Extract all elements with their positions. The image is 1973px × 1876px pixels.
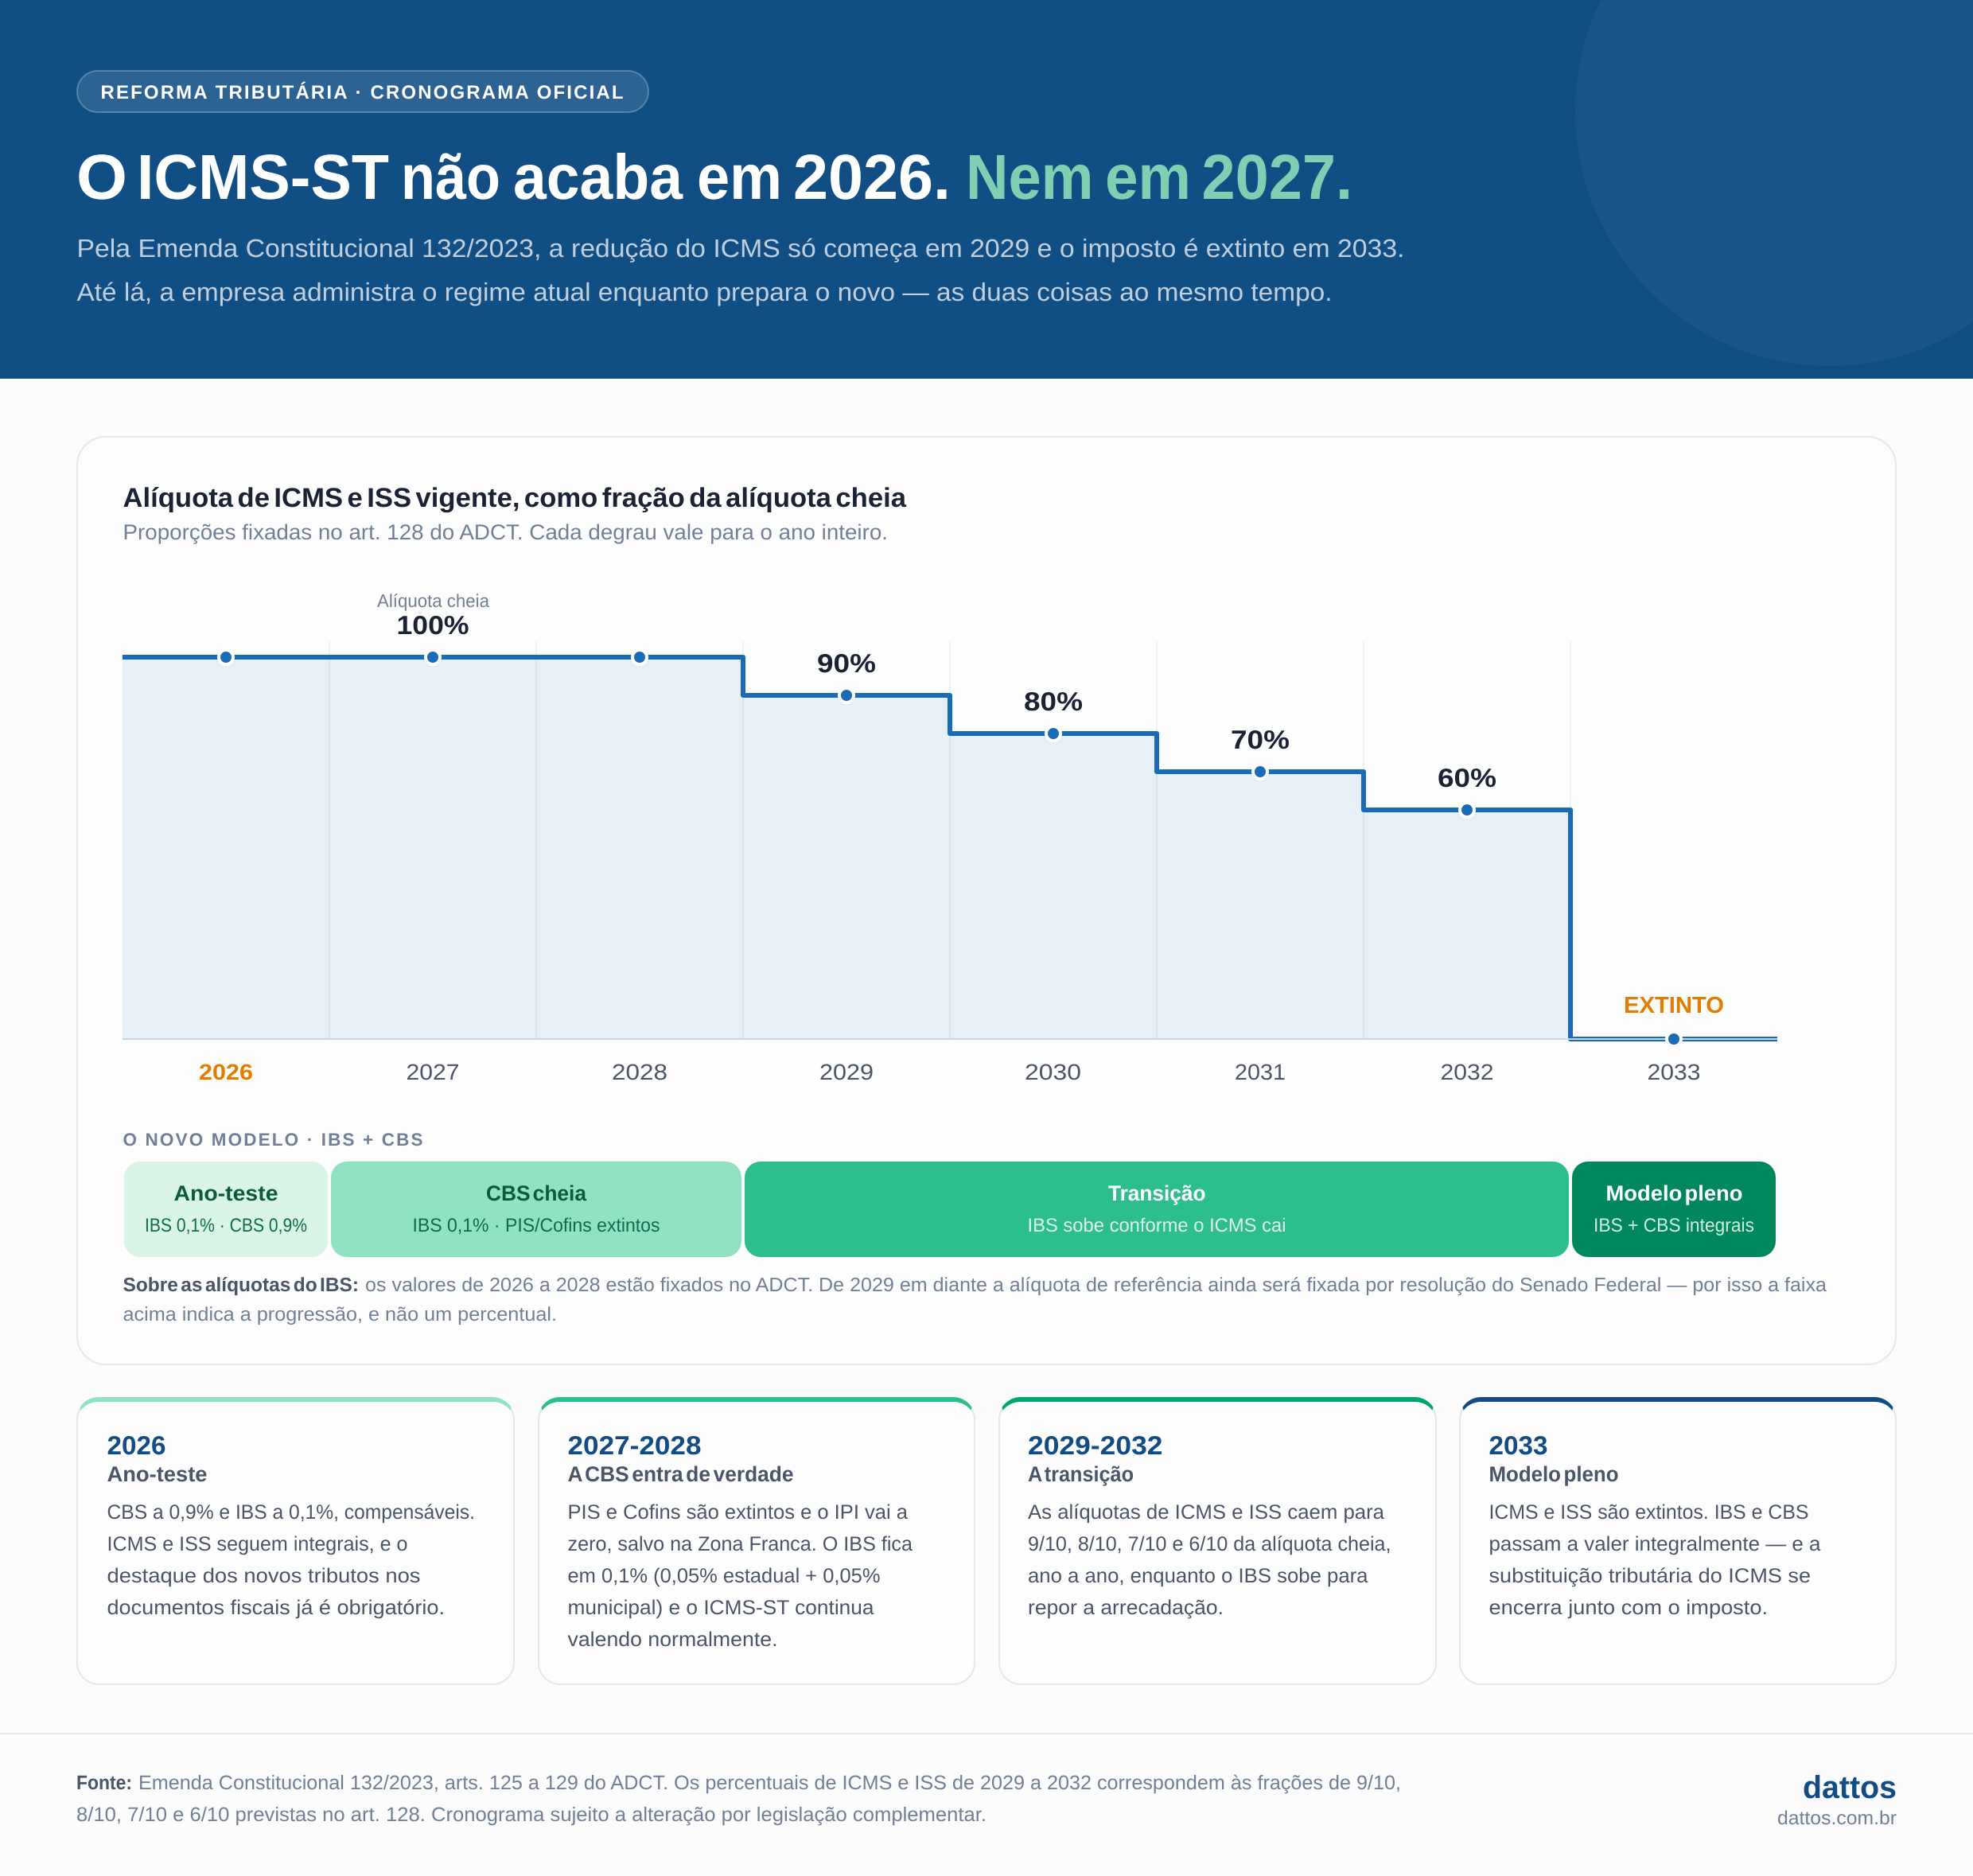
timeline band: CBS cheia: CBS cheia — [486, 1181, 587, 1205]
subtitle: Pela Emenda Constitucional 132/2023, a redução do ICMS só começa em 2029 e o imposto é extinto em 2033. — [76, 234, 1405, 263]
step chart: 2031 — [1235, 1060, 1286, 1084]
step chart: EXTINTO — [1624, 993, 1724, 1018]
card: 2026: ICMS e ISS seguem integrais, e o — [107, 1533, 407, 1555]
title: 2026. — [793, 142, 951, 212]
timeline band: transição: IBS sobe conforme o ICMS cai — [1028, 1215, 1286, 1236]
title: acaba — [513, 142, 683, 212]
card: 2027-2028: 2027-2028 — [568, 1430, 702, 1460]
timeline band: CBS cheia: IBS 0,1% · PIS/Cofins extintos — [412, 1215, 660, 1236]
source note: 8/10, 7/10 e 6/10 previstas no art. 128. Cronograma sujeito a alteração por legislação complementar. — [76, 1804, 986, 1826]
brand — [1777, 1770, 1897, 1829]
chart heading — [123, 483, 907, 544]
card: 2033: passam a valer integralmente — e a — [1489, 1533, 1821, 1555]
card: 2029-2032 — [998, 1397, 1437, 1685]
subtitle: Até lá, a empresa administra o regime atual enquanto prepara o novo — as duas coisas ao mesmo tempo. — [76, 278, 1332, 306]
title: em — [1105, 142, 1191, 212]
timeline band: ano-teste: IBS 0,1% · CBS 0,9% — [145, 1215, 307, 1236]
header banner — [0, 0, 1973, 379]
step chart: 2030 — [1025, 1060, 1081, 1084]
tag pill — [77, 71, 648, 112]
card: 2029-2032: 9/10, 8/10, 7/10 e 6/10 da alíquota cheia, — [1028, 1533, 1391, 1555]
title: 2027. — [1201, 142, 1352, 212]
source note: Emenda Constitucional 132/2023, arts. 125 a 129 do ADCT. Os percentuais de ICMS e ISS de 2029 a 2032 correspondem às frações de 9/10, — [138, 1772, 1401, 1794]
note on IBS rates: os valores de 2026 a 2028 estão fixados no ADCT. De 2029 em diante a alíquota de referência ainda será fixada por resolução do Senado Federal — por isso a faixa — [365, 1275, 1827, 1296]
note on IBS rates: acima indica a progressão, e não um percentual. — [123, 1304, 557, 1325]
step chart: 100% — [396, 610, 469, 640]
step chart: 2033 — [1647, 1060, 1701, 1084]
card: 2027-2028: em 0,1% (0,05% estadual + 0,05% — [568, 1565, 880, 1587]
title: O — [76, 142, 127, 212]
card: 2033: ICMS e ISS são extintos. IBS e CBS — [1489, 1501, 1809, 1524]
timeline band: modelo pleno — [1572, 1162, 1776, 1257]
timeline band: modelo pleno: Modelo pleno — [1605, 1181, 1742, 1205]
section label: new model: O NOVO MODELO · IBS + CBS — [123, 1130, 423, 1150]
brand: dattos — [1803, 1770, 1897, 1805]
step chart: 60% — [1438, 763, 1496, 792]
card: 2033: Modelo pleno — [1489, 1462, 1618, 1486]
step chart: 2027 — [406, 1060, 460, 1084]
card: 2029-2032: 2029-2032 — [1028, 1430, 1163, 1460]
title: em — [697, 142, 782, 212]
timeline band: ano-teste — [124, 1162, 328, 1257]
card: 2027-2028: A CBS entra de verdade — [568, 1462, 794, 1486]
timeline band: CBS cheia — [331, 1162, 741, 1257]
chart heading: Alíquota de ICMS e ISS vigente, como fração da alíquota cheia — [123, 483, 907, 513]
step chart: 90% — [817, 648, 876, 678]
card: 2029-2032: ano a ano, enquanto o IBS sobe para — [1028, 1565, 1368, 1587]
card: 2026: 2026 — [107, 1430, 165, 1460]
card: 2026 — [76, 1397, 515, 1685]
chart heading: Proporções fixadas no art. 128 do ADCT. Cada degrau vale para o ano inteiro. — [123, 520, 888, 544]
card: 2027-2028: municipal) e o ICMS-ST continua — [568, 1597, 874, 1619]
timeline band: ano-teste: Ano-teste — [173, 1181, 278, 1205]
card: 2026: CBS a 0,9% e IBS a 0,1%, compensáveis. — [107, 1501, 475, 1524]
card: 2033: substituição tributária do ICMS se — [1489, 1565, 1811, 1587]
card: 2029-2032: As alíquotas de ICMS e ISS caem para — [1028, 1501, 1385, 1524]
card: 2027-2028: PIS e Cofins são extintos e o IPI vai a — [568, 1501, 909, 1524]
title — [76, 142, 1352, 212]
footer — [0, 1733, 1973, 1829]
card: 2033: encerra junto com o imposto. — [1489, 1597, 1768, 1619]
step chart: Alíquota cheia — [377, 590, 489, 611]
card: 2026: destaque dos novos tributos nos — [107, 1565, 420, 1587]
step chart: 2032 — [1440, 1060, 1494, 1084]
note on IBS rates — [123, 1275, 1827, 1325]
title: ICMS-ST — [137, 142, 389, 212]
title: Nem — [966, 142, 1093, 212]
source note: Fonte: — [76, 1772, 132, 1794]
card: 2029-2032: A transição — [1028, 1462, 1134, 1486]
step chart: 70% — [1231, 725, 1290, 754]
step chart: 2028 — [612, 1060, 667, 1084]
card: 2033 — [1459, 1397, 1897, 1685]
card: 2027-2028 — [538, 1397, 975, 1685]
card: 2026: Ano-teste — [107, 1462, 207, 1486]
tag pill: REFORMA TRIBUTÁRIA · CRONOGRAMA OFICIAL — [100, 81, 624, 103]
title: não — [401, 142, 500, 212]
step chart: 2029 — [819, 1060, 874, 1084]
step chart — [123, 590, 1777, 1084]
card: 2033: 2033 — [1489, 1430, 1548, 1460]
brand: dattos.com.br — [1777, 1808, 1897, 1829]
panel: main chart card — [76, 436, 1897, 1365]
step chart: 2026 — [199, 1060, 253, 1084]
note on IBS rates: Sobre as alíquotas do IBS: — [123, 1275, 359, 1296]
card: 2029-2032: repor a arrecadação. — [1028, 1597, 1224, 1619]
source note — [76, 1772, 1401, 1826]
timeline band: modelo pleno: IBS + CBS integrais — [1594, 1215, 1754, 1236]
card: 2027-2028: valendo normalmente. — [568, 1629, 778, 1651]
timeline band: transição — [745, 1162, 1569, 1257]
step chart: 80% — [1024, 687, 1083, 716]
subtitle — [76, 234, 1405, 306]
timeline band: transição: Transição — [1108, 1181, 1206, 1205]
card: 2027-2028: zero, salvo na Zona Franca. O IBS fica — [568, 1533, 913, 1555]
card: 2026: documentos fiscais já é obrigatório. — [107, 1597, 445, 1619]
